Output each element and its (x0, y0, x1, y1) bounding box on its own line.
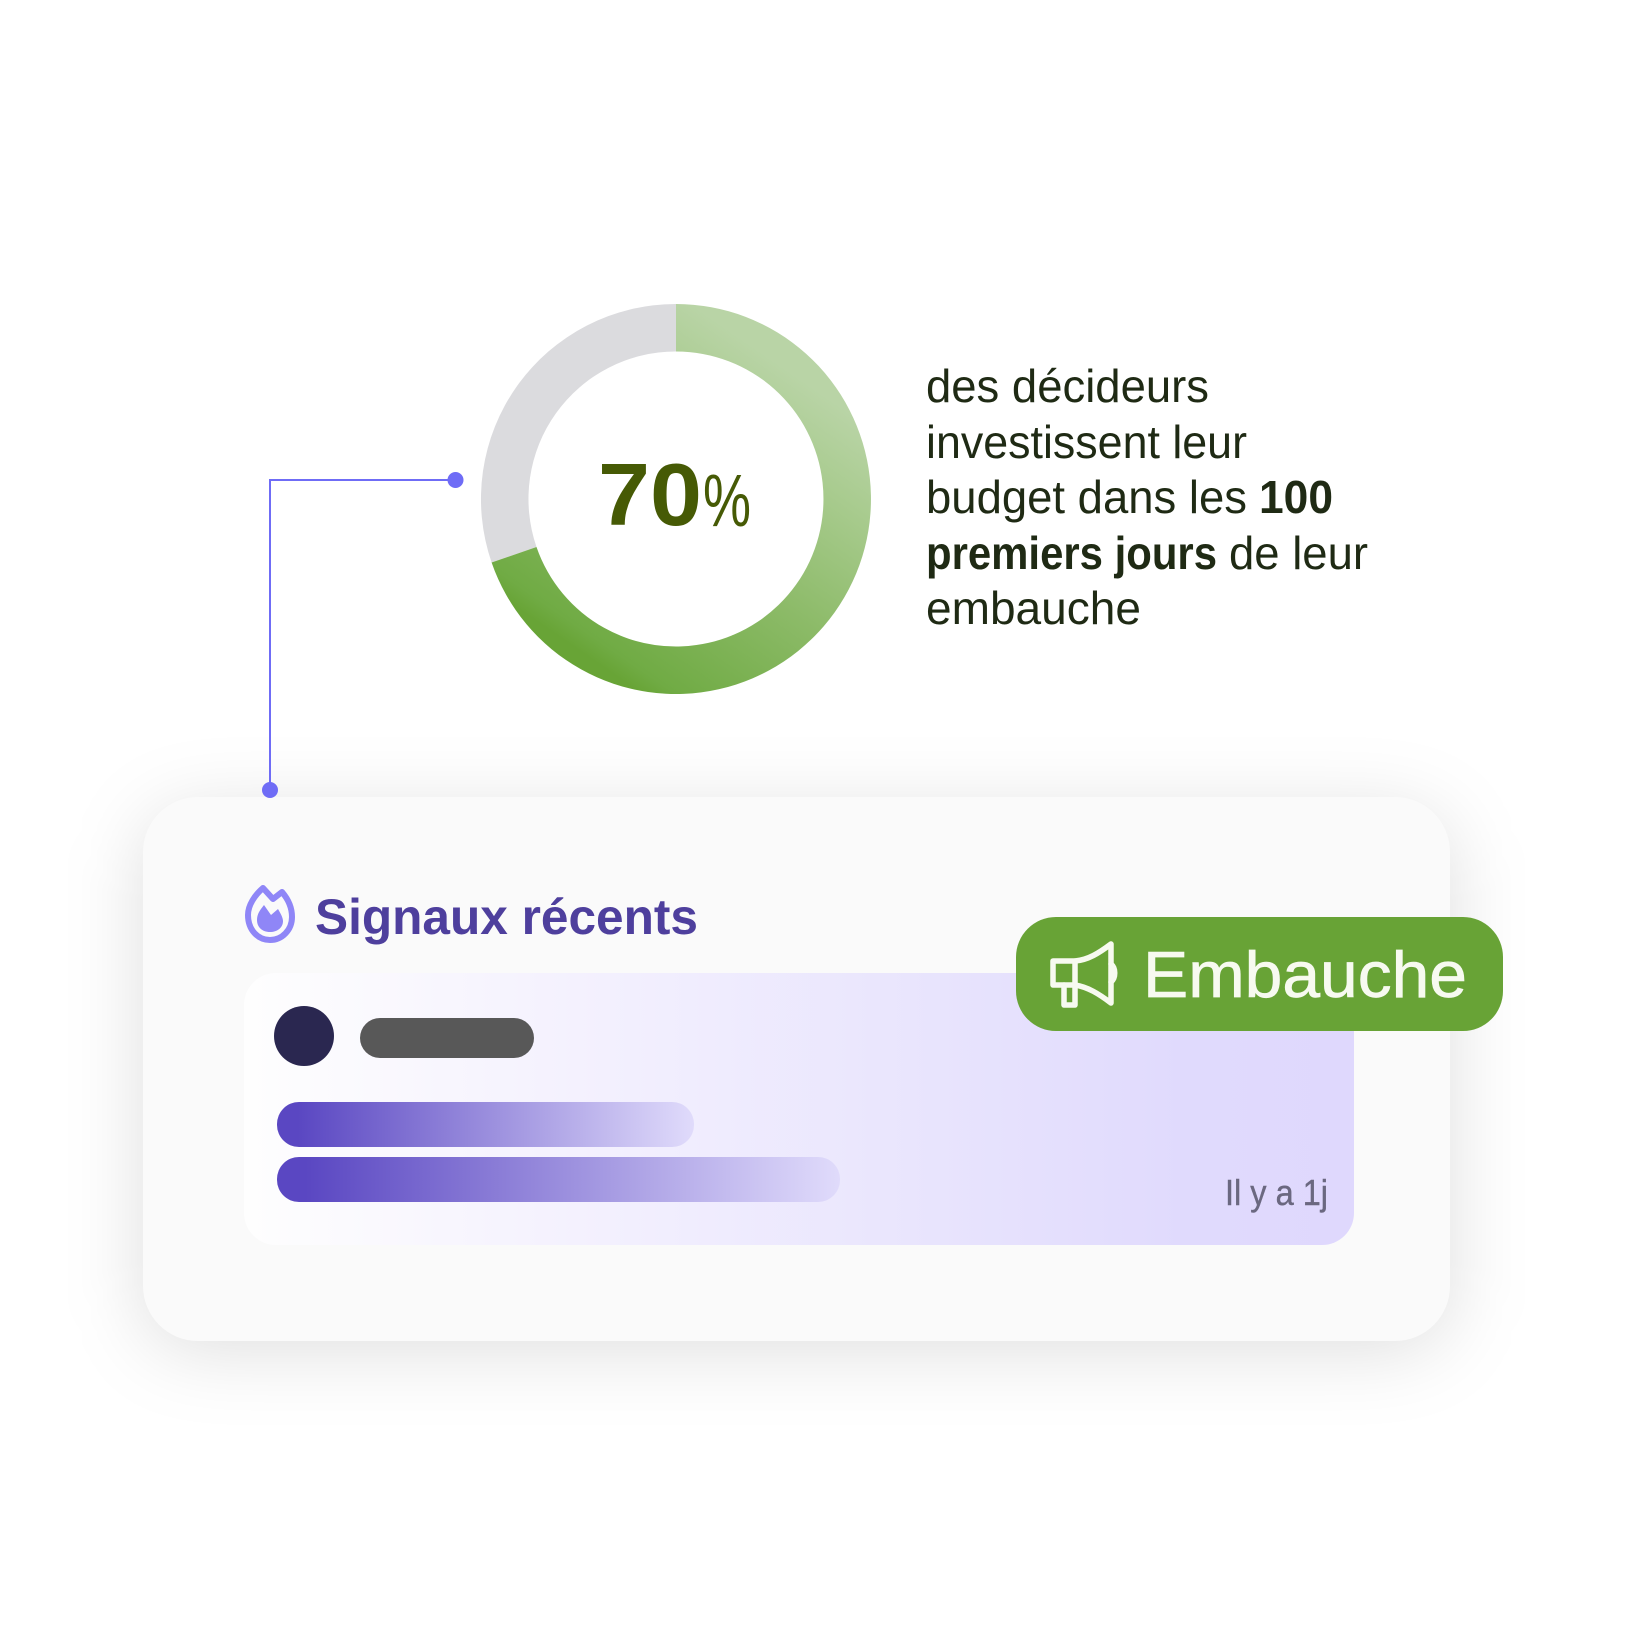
statistic description text: 100 (1259, 471, 1333, 523)
statistic description text: investissent leur (926, 416, 1247, 468)
connector start dot (448, 472, 464, 488)
statistic description text: premiers jours (926, 527, 1217, 579)
text placeholder bar 2 (277, 1157, 840, 1202)
connector line from donut to card (262, 472, 464, 798)
name placeholder (360, 1018, 534, 1058)
timestamp: Il y a 1j (1225, 1172, 1328, 1213)
donut remainder segment (481, 304, 676, 562)
text placeholder bar 1 (277, 1102, 694, 1147)
icon: megaphone (1053, 944, 1115, 1005)
heading: Signaux récents: Signaux récents (315, 889, 698, 945)
statistic description text: des décideurs (926, 360, 1209, 412)
percent sign: % (703, 459, 751, 542)
connector end dot (262, 782, 278, 798)
statistic description text (926, 360, 1368, 634)
icon: flame (248, 888, 292, 940)
donut value segment (492, 304, 871, 694)
card shadow (143, 812, 1450, 1350)
statistic description text: de leur (1229, 527, 1368, 579)
panel: signal row (244, 973, 1354, 1245)
badge: Embauche (1016, 917, 1503, 1031)
avatar (274, 1006, 334, 1066)
donut value: 70%: 70 (598, 445, 702, 544)
badge label: Embauche (1143, 938, 1467, 1011)
donut chart: 70% (481, 304, 871, 694)
statistic description text: budget dans les (926, 471, 1247, 523)
statistic description text: embauche (926, 582, 1141, 634)
panel: signaux récents card (143, 797, 1450, 1341)
